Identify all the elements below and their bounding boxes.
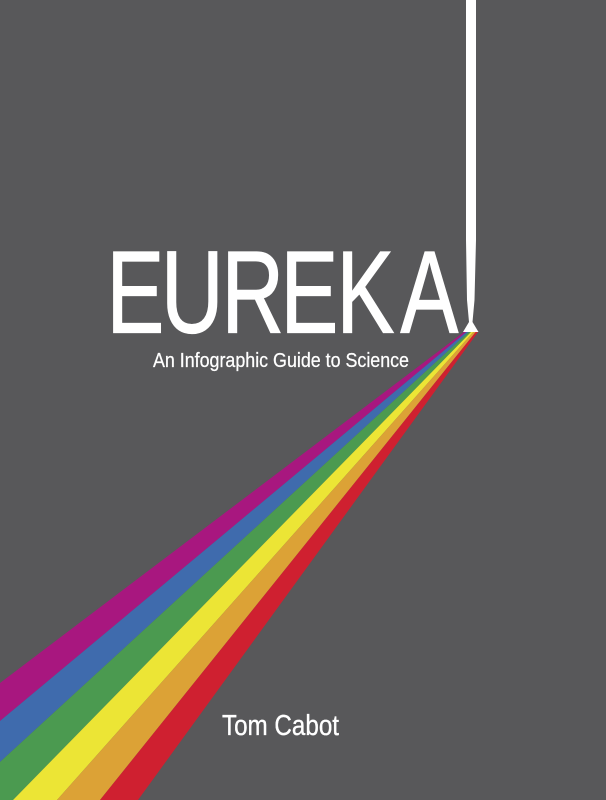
title: EUREKA xyxy=(106,227,459,357)
author: Tom Cabot xyxy=(222,710,339,742)
rainbow rays xyxy=(0,332,478,800)
subtitle: An Infographic Guide to Science xyxy=(153,350,409,372)
white beam and prism xyxy=(463,0,478,332)
